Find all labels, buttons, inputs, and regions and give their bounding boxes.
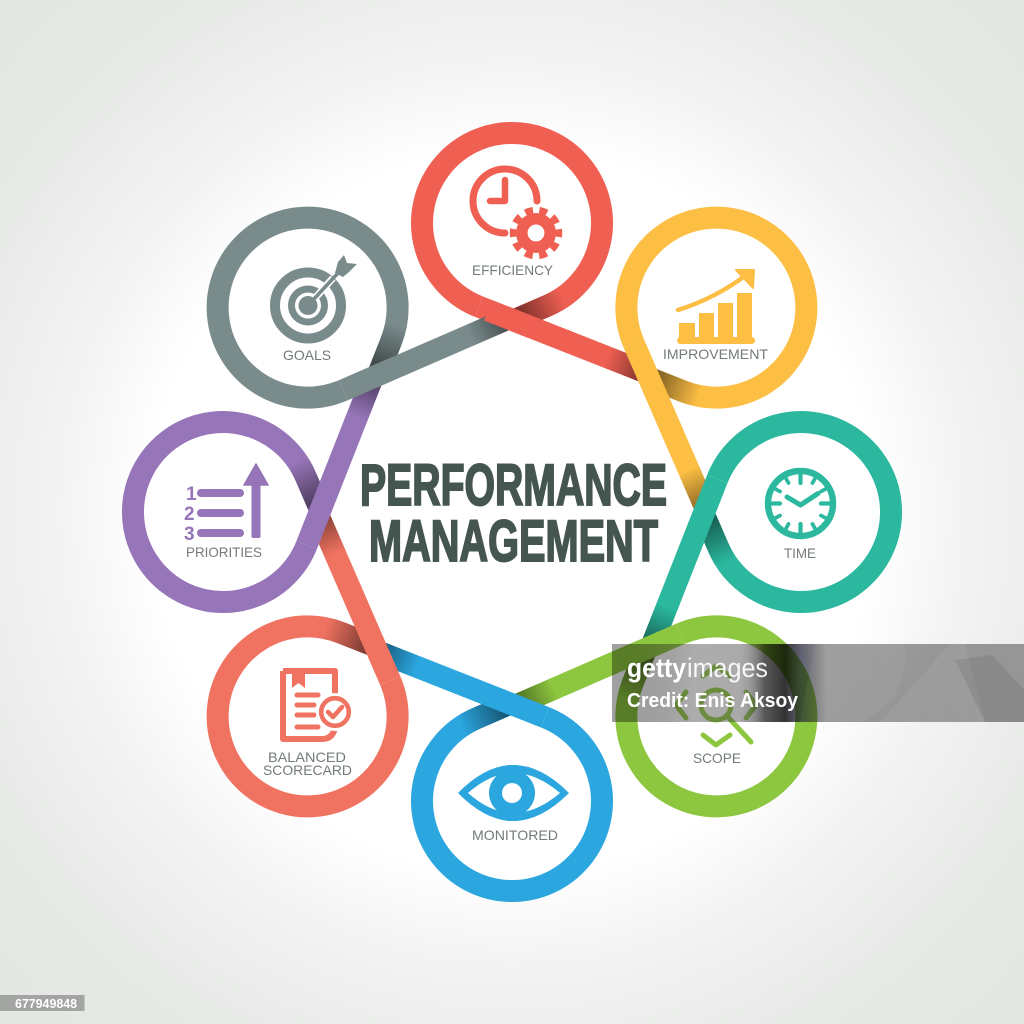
ring: efficiency [422,133,646,372]
ring: goals [180,150,508,477]
ring: time [652,422,891,646]
icon: monitored eye [458,765,569,821]
label: time: TIME [784,545,816,561]
title: MANAGEMENT [369,509,658,574]
label: balanced scorecard: BALANCED [268,749,346,765]
icon: priorities numbered list with arrow: 1 [186,484,197,505]
efficiency tail crossing over the goals tail [488,310,532,328]
icon: priorities numbered list with arrow: 2 [184,504,195,525]
image id tag [0,995,84,1011]
icon: balanced scorecard document [283,671,354,739]
title [360,453,667,574]
icon: efficiency clock and gear [473,169,559,256]
watermark band: Credit: Enis Aksoy [627,690,799,712]
label: scope: SCOPE [693,750,741,766]
ring: scope [516,547,844,874]
icon: improvement bar chart with arrow [677,270,755,344]
label: balanced scorecard [263,749,352,778]
ring: priorities [133,378,372,602]
ring: improvement [547,180,874,508]
icon: priorities numbered list with arrow [184,464,268,545]
image id tag: 677949848 [15,997,77,1011]
watermark band: getty [627,653,686,683]
icon: goals target with arrow [275,255,357,338]
icon: priorities numbered list with arrow: 3 [184,524,195,545]
watermark band [612,644,1024,722]
label: balanced scorecard: SCORECARD [263,762,352,778]
title: PERFORMANCE [360,453,667,518]
watermark band: images [687,653,768,683]
label: improvement: IMPROVEMENT [663,346,768,362]
label: monitored: MONITORED [472,827,558,843]
label: priorities: PRIORITIES [186,544,262,560]
ring: balanced scorecard [150,516,477,844]
icon: time clock [768,471,833,536]
label: goals: GOALS [283,347,331,363]
icon: scope magnifier with chevrons [676,666,756,745]
label: efficiency: EFFICIENCY [472,262,554,278]
ring: monitored [378,652,602,891]
